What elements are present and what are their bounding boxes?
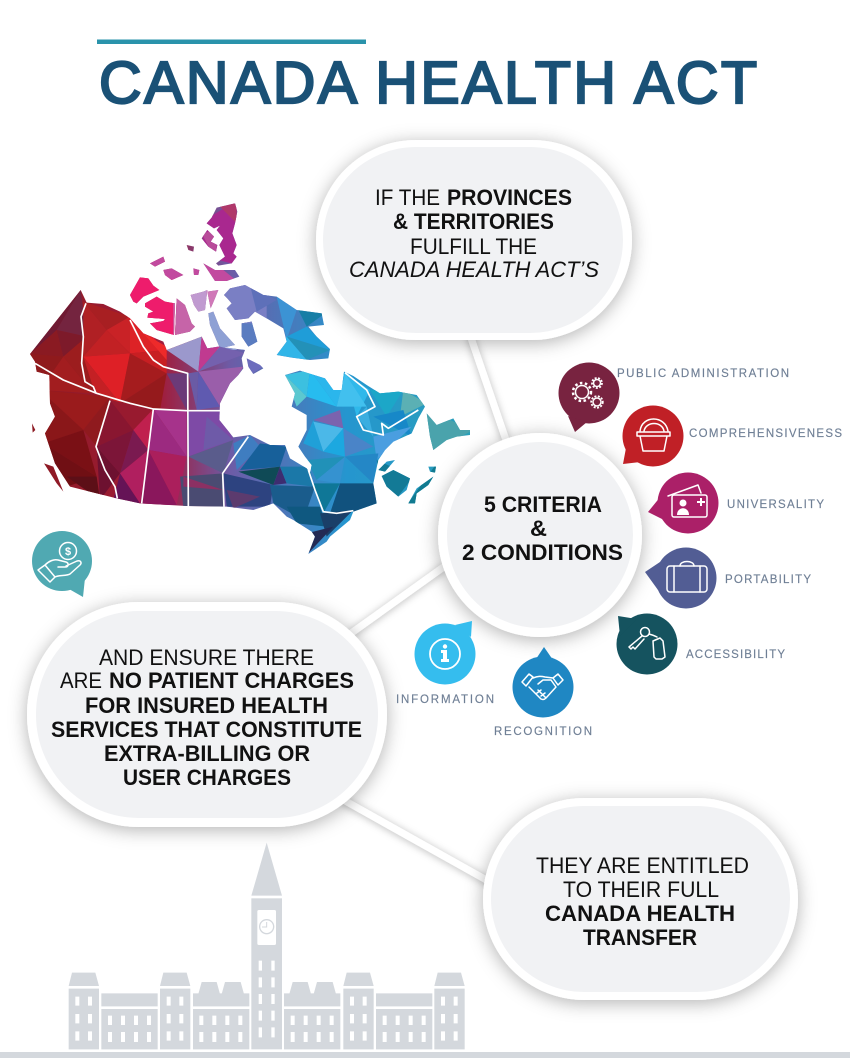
bubble: full canada health transfer [483,798,798,1000]
icon: hand with money: $ [65,546,71,558]
bubble: no patient charges: AND ENSURE THERE [99,645,314,670]
bubble: full canada health transfer: TRANSFER [583,925,697,950]
ground bar [0,1052,850,1058]
connector lines [340,335,506,882]
icon: comprehensiveness [622,406,684,466]
bubble: no patient charges: SERVICES THAT CONSTITUTE [51,717,362,742]
bubble: 5 criteria and 2 conditions [438,433,642,637]
bubble: provinces and territories: CANADA HEALTH ACT’S [349,257,599,282]
label: portability: PORTABILITY [725,574,811,586]
parliament building [69,843,465,1049]
bubble: 5 criteria and 2 conditions: 5 CRITERIA [484,492,602,517]
icon: public administration [558,362,620,432]
map of Canada [20,190,487,557]
bubble: full canada health transfer: CANADA HEALTH [545,901,735,926]
bubble: provinces and territories: & TERRITORIES [393,209,554,234]
icon: accessibility [616,614,678,674]
bubble: no patient charges: ARE [60,668,102,693]
label: recognition: RECOGNITION [494,726,592,738]
bubble: no patient charges [27,602,387,827]
icon: recognition [512,647,574,718]
bubble: full canada health transfer: THEY ARE ENTITLED [536,853,749,878]
bubble: provinces and territories: PROVINCES [447,185,572,210]
label: comprehensiveness: COMPREHENSIVENESS [689,428,842,440]
icon: information [414,621,476,684]
label: public administration: PUBLIC ADMINISTRATION [617,368,789,380]
bubble: full canada health transfer: TO THEIR FULL [563,877,719,902]
bubble: 5 criteria and 2 conditions: & [530,516,547,541]
bubble: no patient charges: FOR INSURED HEALTH [85,693,328,718]
bubble: provinces and territories [316,140,632,340]
icon: universality [648,472,718,534]
icon: hand with money [32,531,92,597]
bubble: 5 criteria and 2 conditions: 2 CONDITIONS [462,540,623,565]
bubble: no patient charges: NO PATIENT CHARGES [109,668,354,693]
label: universality: UNIVERSALITY [727,499,824,511]
bubble: no patient charges: USER CHARGES [123,765,291,790]
bubble: provinces and territories: IF THE [375,185,440,210]
title rule [97,40,366,44]
icon: portability [645,548,716,608]
title: CANADA HEALTH ACT [99,50,757,116]
province borders [35,303,418,513]
bubble: provinces and territories: FULFILL THE [410,234,537,259]
label: accessibility: ACCESSIBILITY [686,649,785,661]
label: information: INFORMATION [396,694,494,706]
bubble: no patient charges: EXTRA-BILLING OR [104,741,310,766]
